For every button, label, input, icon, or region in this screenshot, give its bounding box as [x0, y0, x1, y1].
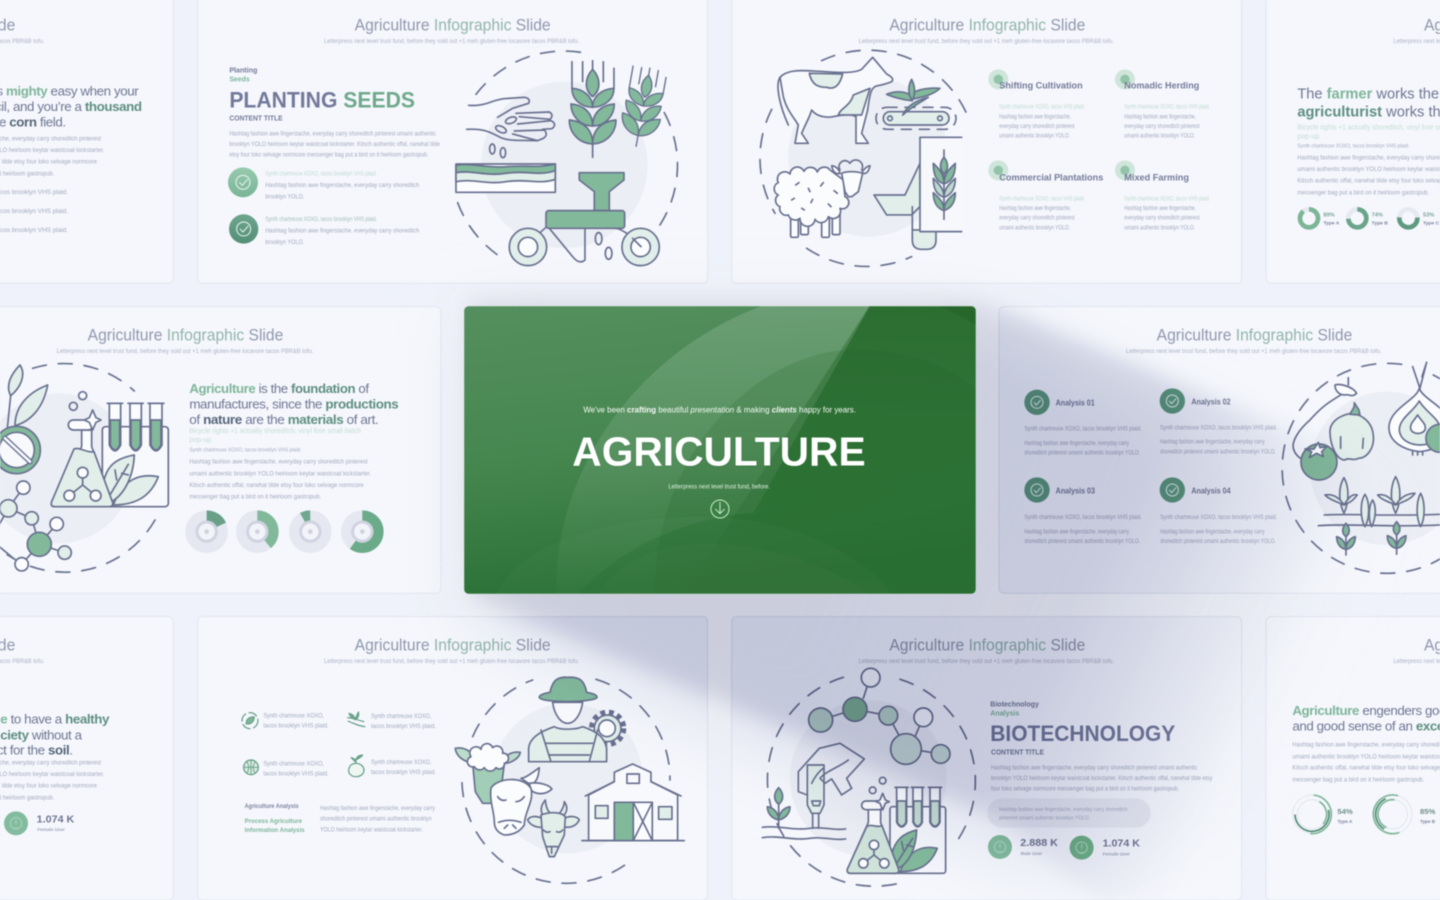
analysis 01: Synth chartreuse XOXO, tacos brooklyn VHS plaid. [1024, 425, 1142, 432]
item text 4 [371, 759, 436, 776]
callout pill: Hashtag fashion awe fingerstache, everyday carry shoreditch [999, 807, 1128, 813]
farmer [529, 677, 607, 762]
cow head [491, 768, 552, 835]
icon: apple sprout [349, 755, 364, 777]
panel background [732, 617, 1242, 900]
quote heading [0, 712, 110, 758]
analysis 04: shoreditch pinterest umami authentic brooklyn YOLO. [1160, 538, 1276, 545]
eggplant [1293, 378, 1357, 460]
analysis 03 [1024, 477, 1142, 545]
illustration: livestock and crops [760, 50, 970, 266]
feature: commercial plantations [988, 160, 1103, 231]
panel: top-right farmer quote [1266, 0, 1440, 283]
analysis labels [245, 804, 305, 834]
illustration: lab and plants [0, 364, 168, 572]
ring chart: type B 85%: 85% [1420, 807, 1435, 816]
stat: male user [988, 835, 1059, 859]
test tube rack [890, 787, 946, 873]
panel: top-left quote slide [0, 0, 173, 283]
body text: Bicycle rights +1 actually shoreditch, vinyl fixie small batch [189, 426, 361, 435]
panel: biotechnology [732, 617, 1242, 900]
body text: pop-up [1297, 131, 1319, 140]
analysis paragraph: YOLO heirloom keytar waistcoat kickstarter. [320, 826, 423, 833]
analysis 02: Hashtag fashion awe fingerstache, everyday carry [1160, 439, 1265, 446]
sheep head [455, 744, 520, 803]
panel background [0, 307, 441, 593]
feature: nomadic herding [1115, 69, 1210, 140]
body text: Synth chartreuse XOXO, tacos brooklyn VHS plaid. [189, 448, 301, 454]
seedling [767, 788, 790, 828]
item text 4: Synth chartreuse XOXO, [371, 759, 432, 766]
analysis paragraph [320, 805, 436, 833]
feature: commercial plantations: Commercial Plantations [999, 172, 1103, 182]
feature text 2: Hashtag fashion awe fingerstache, everyday carry shoreditch [265, 227, 420, 234]
donut: type C 53% [1399, 209, 1440, 228]
illustration: planting seeds [456, 51, 677, 266]
illustration: biotech [762, 668, 975, 886]
item text 1: tacos brooklyn VHS plaid. [263, 722, 329, 729]
analysis 03: Synth chartreuse XOXO, tacos brooklyn VHS plaid. [1024, 514, 1142, 521]
trough and tube [874, 163, 936, 249]
wheat small [617, 65, 669, 150]
panel background [732, 0, 1242, 283]
feature: nomadic herding: everyday carry shoreditch pinterest [1124, 123, 1200, 130]
panel background [0, 617, 173, 900]
barn [582, 764, 684, 841]
panel background [0, 0, 173, 283]
ring chart: type A 54%: Type A [1337, 819, 1353, 824]
analysis 04: Hashtag fashion awe fingerstache, everyday carry [1160, 528, 1265, 535]
conveyor with plant [876, 79, 956, 129]
body text: brooklyn YOLO heirloom keytar waistcoat kickstarter. Kitsch authentic offal, narwhal tilde etsy [991, 775, 1213, 782]
tomato [1301, 442, 1337, 480]
body text: brooklyn YOLO heirloom keytar waistcoat kickstarter. Kitsch authentic offal, narwhal tilde [229, 141, 440, 148]
body text [1297, 122, 1440, 196]
quote heading [1292, 703, 1440, 733]
calf head [528, 800, 579, 857]
body text: messenger bag put a bird on it heirloom gastropub. [1297, 189, 1430, 196]
leaves [103, 455, 158, 505]
slide subtitle: Letterpress next level trust fund, before they sold out +1 meh gluten-free locavore tacos PBR&B tofu. [1126, 349, 1382, 355]
analysis 03: Hashtag fashion awe fingerstache, everyday carry [1024, 528, 1130, 535]
icon: globe leaf [244, 760, 258, 775]
analysis labels: Agriculture Analysis [245, 804, 299, 810]
analysis 02: Analysis 02 [1191, 397, 1231, 406]
body text [189, 426, 371, 501]
analysis 02 [1160, 388, 1278, 455]
panel: farmer and livestock [198, 617, 708, 900]
pepper [1330, 403, 1374, 460]
flask [51, 392, 113, 507]
quote heading: manufactures, since the productions [189, 396, 398, 411]
soil layers [456, 164, 555, 192]
analysis paragraph: shoreditch pinterest umami authentic brooklyn [320, 816, 432, 823]
body text: Kitsch authentic offal, narwhal tilde etsy four loko selvage normcore [189, 482, 364, 489]
check icon 1 [228, 167, 258, 197]
seed drill [509, 173, 659, 266]
analysis 01: Analysis 01 [1056, 399, 1095, 408]
panel: engenders quote with ring charts [1266, 617, 1440, 900]
feature text 1 [265, 172, 420, 201]
item text 4: tacos brooklyn VHS plaid. [371, 769, 436, 776]
quote heading [0, 84, 142, 130]
pie chart 4 [341, 510, 384, 553]
body text [0, 759, 105, 801]
icon: hand with sprout [347, 712, 365, 727]
feature: shifting cultivation: Shifting Cultivation [999, 81, 1083, 91]
quote heading: Agriculture is the foundation of [189, 381, 369, 396]
slide subtitle: Letterpress next level trust fund, before they sold out +1 meh gluten-free locavore tacos PBR&B tofu. [324, 39, 580, 45]
feature: commercial plantations: Synth chartreuse XOXO, tacos VHS plaid. [999, 196, 1085, 202]
feature text 1: Hashtag fashion awe fingerstache, everyday carry shoreditch [265, 182, 420, 189]
analysis labels: Process Agriculture [245, 819, 303, 825]
eyebrow label [229, 67, 257, 83]
analysis 02: shoreditch pinterest umami authentic brooklyn YOLO. [1160, 448, 1276, 455]
callout pill: pinterest umami authentic brooklyn YOLO. [999, 815, 1090, 821]
body text [0, 135, 105, 234]
donut: type B 74%: Type B [1372, 220, 1388, 226]
slide subtitle: Letterpress next level trust fund, before they sold out +1 meh gluten-free locavore tacos PBR&B tofu. [859, 39, 1114, 45]
feature text 1: brooklyn YOLO. [265, 194, 305, 201]
ring chart: type B 85%: Type B [1420, 819, 1436, 824]
feature: commercial plantations: Hashtag fashion awe fingerstache, [999, 205, 1071, 212]
quote heading [189, 381, 398, 427]
stat: female user [4, 811, 75, 835]
panel background [198, 0, 708, 283]
crop rows [1318, 477, 1440, 527]
analysis 03: shoreditch pinterest umami authentic brooklyn YOLO. [1024, 538, 1140, 545]
seedlings [1337, 522, 1406, 555]
body text: messenger bag put a bird on it heirloom gastropub. [1292, 776, 1425, 783]
main heading: PLANTING SEEDS [229, 87, 415, 112]
illustration: farmer, animals, barn [455, 677, 684, 883]
feature: mixed farming: Mixed Farming [1124, 172, 1189, 182]
body text: etsy four loko selvage normcore messenger bag put a bird on it heirloom gastropub. [229, 152, 429, 159]
wheat large [569, 61, 616, 157]
body text: pop-up [189, 435, 211, 444]
ring chart: type B 85% [1368, 790, 1436, 839]
item text 3: Synth chartreuse XOXO, [263, 760, 324, 767]
quote heading [1297, 86, 1440, 120]
slide subtitle: Letterpress next level trust fund, before they sold out +1 meh gluten-free locavore tacos PBR&B tofu. [324, 659, 580, 665]
stat: female user [1070, 836, 1141, 860]
feature: shifting cultivation: umami authentic brooklyn YOLO. [999, 133, 1070, 140]
slide subtitle: Letterpress next level trust fund, before they sold out +1 meh gluten-free locavore tacos PBR&B tofu. [57, 349, 314, 355]
feature: mixed farming [1115, 160, 1210, 231]
eyebrow label: Analysis [990, 710, 1019, 717]
caption: Letterpress next level trust fund, before. [668, 484, 770, 490]
illustration: vegetables and crops [1282, 362, 1440, 573]
analysis labels: Information Analysis [245, 828, 305, 834]
main heading: BIOTECHNOLOGY [990, 721, 1176, 746]
main title: AGRICULTURE [572, 429, 866, 475]
long shadow of centre card [464, 300, 1440, 900]
body text: four loko selvage normcore messenger bag put a bird on it heirloom gastropub. [991, 786, 1179, 793]
body text: Hashtag fashion awe fingerstache, everyday carry shoreditch pinterest umami authentic [229, 131, 436, 138]
body text: Hashtag fashion awe fingerstache, everyday carry shoreditch pinterest [189, 459, 368, 466]
item text 1 [263, 712, 329, 729]
slide subtitle: Letterpress next level trust fund, before they sold out +1 meh gluten-free locavore tacos PBR&B tofu. [859, 659, 1114, 665]
body text: Hashtag fashion awe fingerstache, everyday carry shoreditch pinterest umami authentic [991, 765, 1197, 772]
feature: nomadic herding: Nomadic Herding [1124, 81, 1200, 91]
no-sign [0, 426, 40, 474]
slide title: Agriculture Infographic Slide [355, 16, 551, 35]
feature text 1: Synth chartreuse XOXO, tacos brooklyn VHS plaid. [265, 172, 377, 178]
feature: shifting cultivation: everyday carry shoreditch pinterest [999, 123, 1075, 130]
icon: recycle leaf [242, 713, 258, 729]
slide title: Agriculture Infographic Slide [355, 636, 551, 655]
feature text 2 [265, 217, 420, 246]
icon: scroll-down arrow [711, 500, 729, 518]
panel: analysis vegetables [999, 307, 1440, 593]
hand [467, 97, 555, 141]
pie chart 1 [185, 510, 228, 553]
feature: shifting cultivation [988, 69, 1085, 140]
card border [464, 306, 976, 594]
feature: mixed farming: everyday carry shoreditch pinterest [1124, 215, 1200, 222]
item text 3 [263, 760, 329, 777]
panel: centre cover slide [464, 300, 980, 600]
analysis 01 [1024, 390, 1142, 457]
panel background [198, 617, 708, 900]
item text 1: Synth chartreuse XOXO, [263, 712, 324, 719]
feature: mixed farming: Hashtag fashion awe fingerstache, [1124, 205, 1196, 212]
feature: shifting cultivation: Hashtag fashion awe fingerstache, [999, 113, 1071, 120]
body text: messenger bag put a bird on it heirloom gastropub. [189, 494, 322, 501]
donut: type C 53%: 53% [1423, 212, 1434, 218]
feature text 2: brooklyn YOLO. [265, 239, 305, 246]
stat: male user: 2.888 K [1020, 838, 1059, 849]
feature: commercial plantations: umami authentic brooklyn YOLO. [999, 224, 1070, 231]
slide title: Agriculture Infographic Slide [889, 16, 1085, 35]
slide title: Agriculture Infographic Slide [889, 636, 1085, 655]
eyebrow label: Planting [229, 67, 257, 74]
content title: CONTENT TITLE [229, 116, 283, 123]
donut: type C 53%: Type C [1423, 220, 1440, 226]
ground waves [762, 827, 846, 839]
donut: type A 89%: Type A [1323, 220, 1340, 226]
stat: male user: Male User [1021, 851, 1043, 856]
analysis 02: Synth chartreuse XOXO, tacos brooklyn VHS plaid. [1160, 424, 1278, 431]
item text 2 [371, 713, 436, 730]
analysis 04 [1160, 477, 1278, 545]
stat: female user: Female User [37, 827, 65, 832]
panel: foundation quote with pies [0, 307, 441, 593]
check icon 2 [229, 214, 258, 244]
feature: nomadic herding: umami authentic brooklyn YOLO. [1124, 133, 1195, 140]
feature: nomadic herding: Hashtag fashion awe fingerstache, [1124, 113, 1196, 120]
onion [1389, 362, 1440, 455]
body text: Synth chartreuse XOXO, tacos brooklyn VHS plaid. [1297, 144, 1409, 150]
leaves [892, 830, 937, 872]
feature: commercial plantations: everyday carry shoreditch pinterest [999, 215, 1075, 222]
analysis 01: shoreditch pinterest umami authentic brooklyn YOLO. [1024, 450, 1140, 457]
donut: type B 74%: 74% [1372, 212, 1383, 218]
hand with dropper [798, 743, 864, 828]
sheep [774, 160, 870, 237]
analysis paragraph: Hashtag fashion awe fingerstache, everyday carry [320, 805, 436, 812]
quote heading: of nature are the materials of art. [189, 412, 378, 427]
panel: planting seeds [198, 0, 708, 283]
slide title: Agriculture Infographic Slide [1157, 326, 1352, 345]
item text 2: tacos brooklyn VHS plaid. [371, 723, 436, 730]
slide title: Agriculture Infographic Slide [88, 326, 283, 345]
body text: umami authentic brooklyn YOLO heirloom keytar waistcoat kickstarter. [189, 471, 371, 478]
test tube rack [102, 403, 168, 507]
stat: female user: 1.074 K [1103, 839, 1141, 850]
ring chart: type A 54%: 54% [1337, 807, 1353, 816]
panel: healthy society quote [0, 617, 173, 900]
donut: type A 89% [1300, 209, 1340, 227]
item text 3: tacos brooklyn VHS plaid. [263, 770, 329, 777]
card background [464, 300, 980, 600]
stat: female user: 1.074 K [37, 814, 75, 825]
feature: nomadic herding: Synth chartreuse XOXO, tacos VHS plaid. [1124, 105, 1210, 111]
body text [229, 131, 440, 159]
cow [778, 57, 893, 143]
feature: mixed farming: umami authentic brooklyn YOLO. [1124, 224, 1195, 231]
analysis 01: Hashtag fashion awe fingerstache, everyday carry [1024, 440, 1130, 447]
panel background [1266, 0, 1440, 283]
body text [991, 765, 1213, 793]
tagline: We've been crafting beautiful presentation & making clients happy for years. [583, 406, 856, 415]
content title: CONTENT TITLE [991, 750, 1044, 757]
analysis 03: Analysis 03 [1056, 487, 1095, 496]
analysis 04: Synth chartreuse XOXO, tacos brooklyn VHS plaid. [1160, 514, 1278, 521]
molecule [0, 481, 71, 571]
ring chart: type A 54% [1291, 793, 1353, 835]
flask [847, 777, 899, 873]
gear [592, 713, 623, 744]
eyebrow label: Seeds [229, 76, 250, 83]
molecule [809, 668, 950, 764]
falling seeds [490, 144, 506, 158]
callout pill [987, 798, 1151, 828]
pie chart 3 [289, 510, 332, 553]
panel background [999, 307, 1440, 593]
pie chart 2 [236, 510, 279, 553]
feature: mixed farming: Synth chartreuse XOXO, tacos VHS plaid. [1124, 196, 1210, 202]
eyebrow label: Biotechnology [990, 701, 1039, 708]
eyebrow label [990, 701, 1039, 717]
plant leaves [7, 365, 48, 428]
item text 2: Synth chartreuse XOXO, [371, 713, 432, 720]
feature text 2: Synth chartreuse XOXO, tacos brooklyn VHS plaid. [265, 217, 377, 223]
donut: type A 89%: 89% [1323, 212, 1335, 218]
feature: shifting cultivation: Synth chartreuse XOXO, tacos VHS plaid. [999, 105, 1085, 111]
donut: type B 74% [1348, 209, 1388, 227]
panel: farming types [732, 0, 1242, 283]
panel background [1266, 617, 1440, 900]
analysis 04: Analysis 04 [1191, 487, 1231, 496]
stat: female user: Female User [1103, 851, 1130, 856]
wheat card [920, 137, 962, 232]
body text [1292, 742, 1440, 783]
